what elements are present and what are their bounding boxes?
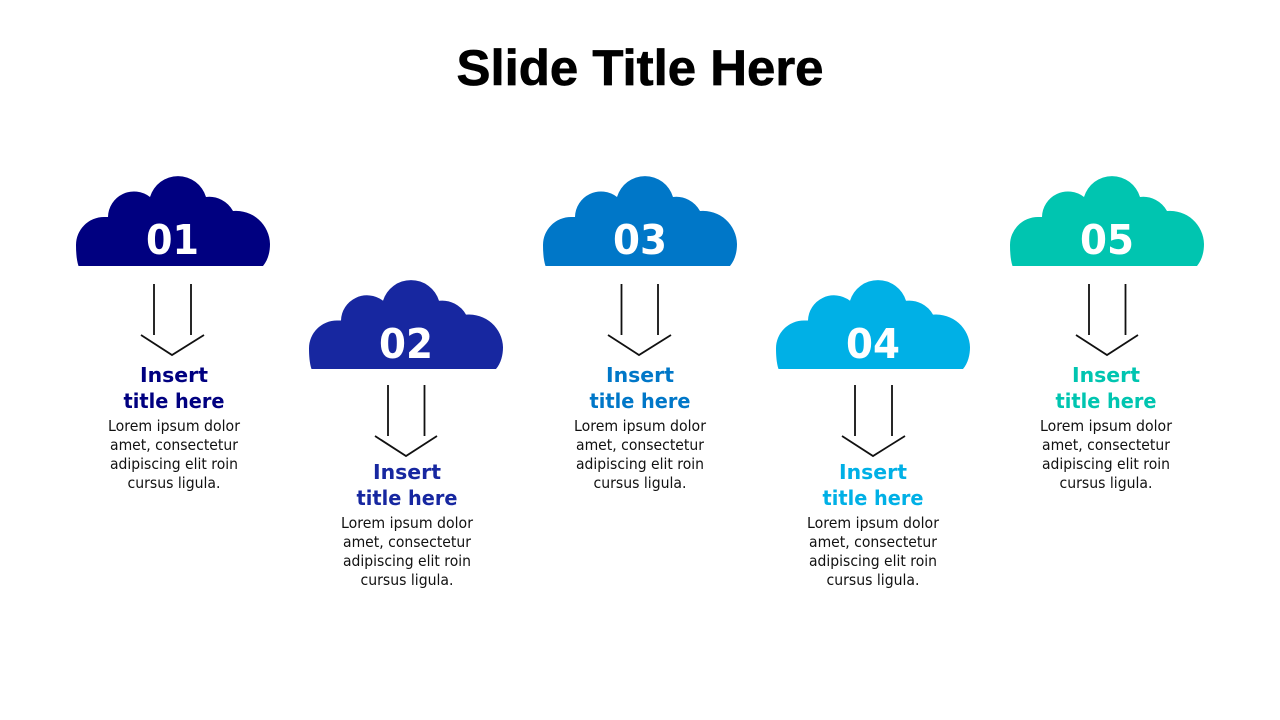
- text block 03: Lorem ipsum dolor: [574, 417, 707, 435]
- text block 03: cursus ligula.: [594, 474, 686, 492]
- text block 04: adipiscing elit roin: [809, 552, 937, 570]
- text block 01: amet, consectetur: [110, 436, 239, 454]
- arrow 01: [141, 284, 204, 355]
- text block 05: adipiscing elit roin: [1042, 455, 1170, 473]
- heading 01: [124, 363, 224, 413]
- number 02: 02: [379, 320, 433, 368]
- text block 01: Lorem ipsum dolor: [108, 417, 241, 435]
- icon: cloud 03: [543, 176, 737, 266]
- text block 04: cursus ligula.: [826, 571, 920, 589]
- heading 01: Insert: [140, 363, 208, 387]
- heading 02: [356, 460, 458, 510]
- step 01: [76, 176, 270, 492]
- arrow 02: [375, 385, 437, 456]
- title: Slide Title Here: [456, 40, 824, 96]
- heading 03: title here: [590, 389, 690, 413]
- heading 03: [590, 363, 690, 413]
- icon: cloud 04: [776, 280, 970, 369]
- arrow 05: [1076, 284, 1138, 355]
- heading 03: Insert: [606, 363, 674, 387]
- text block 02: Lorem ipsum dolor: [341, 514, 474, 532]
- heading 04: Insert: [839, 460, 907, 484]
- heading 05: title here: [1056, 389, 1156, 413]
- text block 04: amet, consectetur: [809, 533, 938, 551]
- step 03: [543, 176, 737, 492]
- heading 05: [1056, 363, 1156, 413]
- icon: cloud 05: [1010, 176, 1204, 266]
- text block 02: [341, 514, 474, 589]
- number 05: 05: [1080, 216, 1134, 264]
- text block 03: [574, 417, 707, 492]
- text block 03: amet, consectetur: [576, 436, 705, 454]
- heading 04: [822, 460, 924, 510]
- text block 05: [1040, 417, 1173, 492]
- text block 03: adipiscing elit roin: [576, 455, 704, 473]
- arrow 03: [608, 284, 671, 355]
- text block 02: adipiscing elit roin: [343, 552, 471, 570]
- heading 02: title here: [356, 486, 458, 510]
- step 05: [1010, 176, 1204, 492]
- text block 05: cursus ligula.: [1060, 474, 1152, 492]
- text block 05: Lorem ipsum dolor: [1040, 417, 1173, 435]
- number 01: 01: [146, 216, 199, 264]
- icon: cloud 01: [76, 176, 270, 266]
- icon: cloud 02: [309, 280, 503, 369]
- text block 04: [807, 514, 940, 589]
- text block 01: cursus ligula.: [128, 474, 220, 492]
- heading 05: Insert: [1072, 363, 1140, 387]
- text block 01: [108, 417, 241, 492]
- heading 02: Insert: [373, 460, 441, 484]
- text block 02: amet, consectetur: [343, 533, 472, 551]
- heading 04: title here: [822, 486, 924, 510]
- arrow 04: [842, 385, 905, 456]
- text block 04: Lorem ipsum dolor: [807, 514, 940, 532]
- text block 02: cursus ligula.: [360, 571, 454, 589]
- number 03: 03: [613, 216, 667, 264]
- step 04: [776, 280, 970, 589]
- text block 05: amet, consectetur: [1042, 436, 1171, 454]
- text block 01: adipiscing elit roin: [110, 455, 238, 473]
- heading 01: title here: [124, 389, 224, 413]
- step 02: [309, 280, 503, 589]
- number 04: 04: [846, 320, 900, 368]
